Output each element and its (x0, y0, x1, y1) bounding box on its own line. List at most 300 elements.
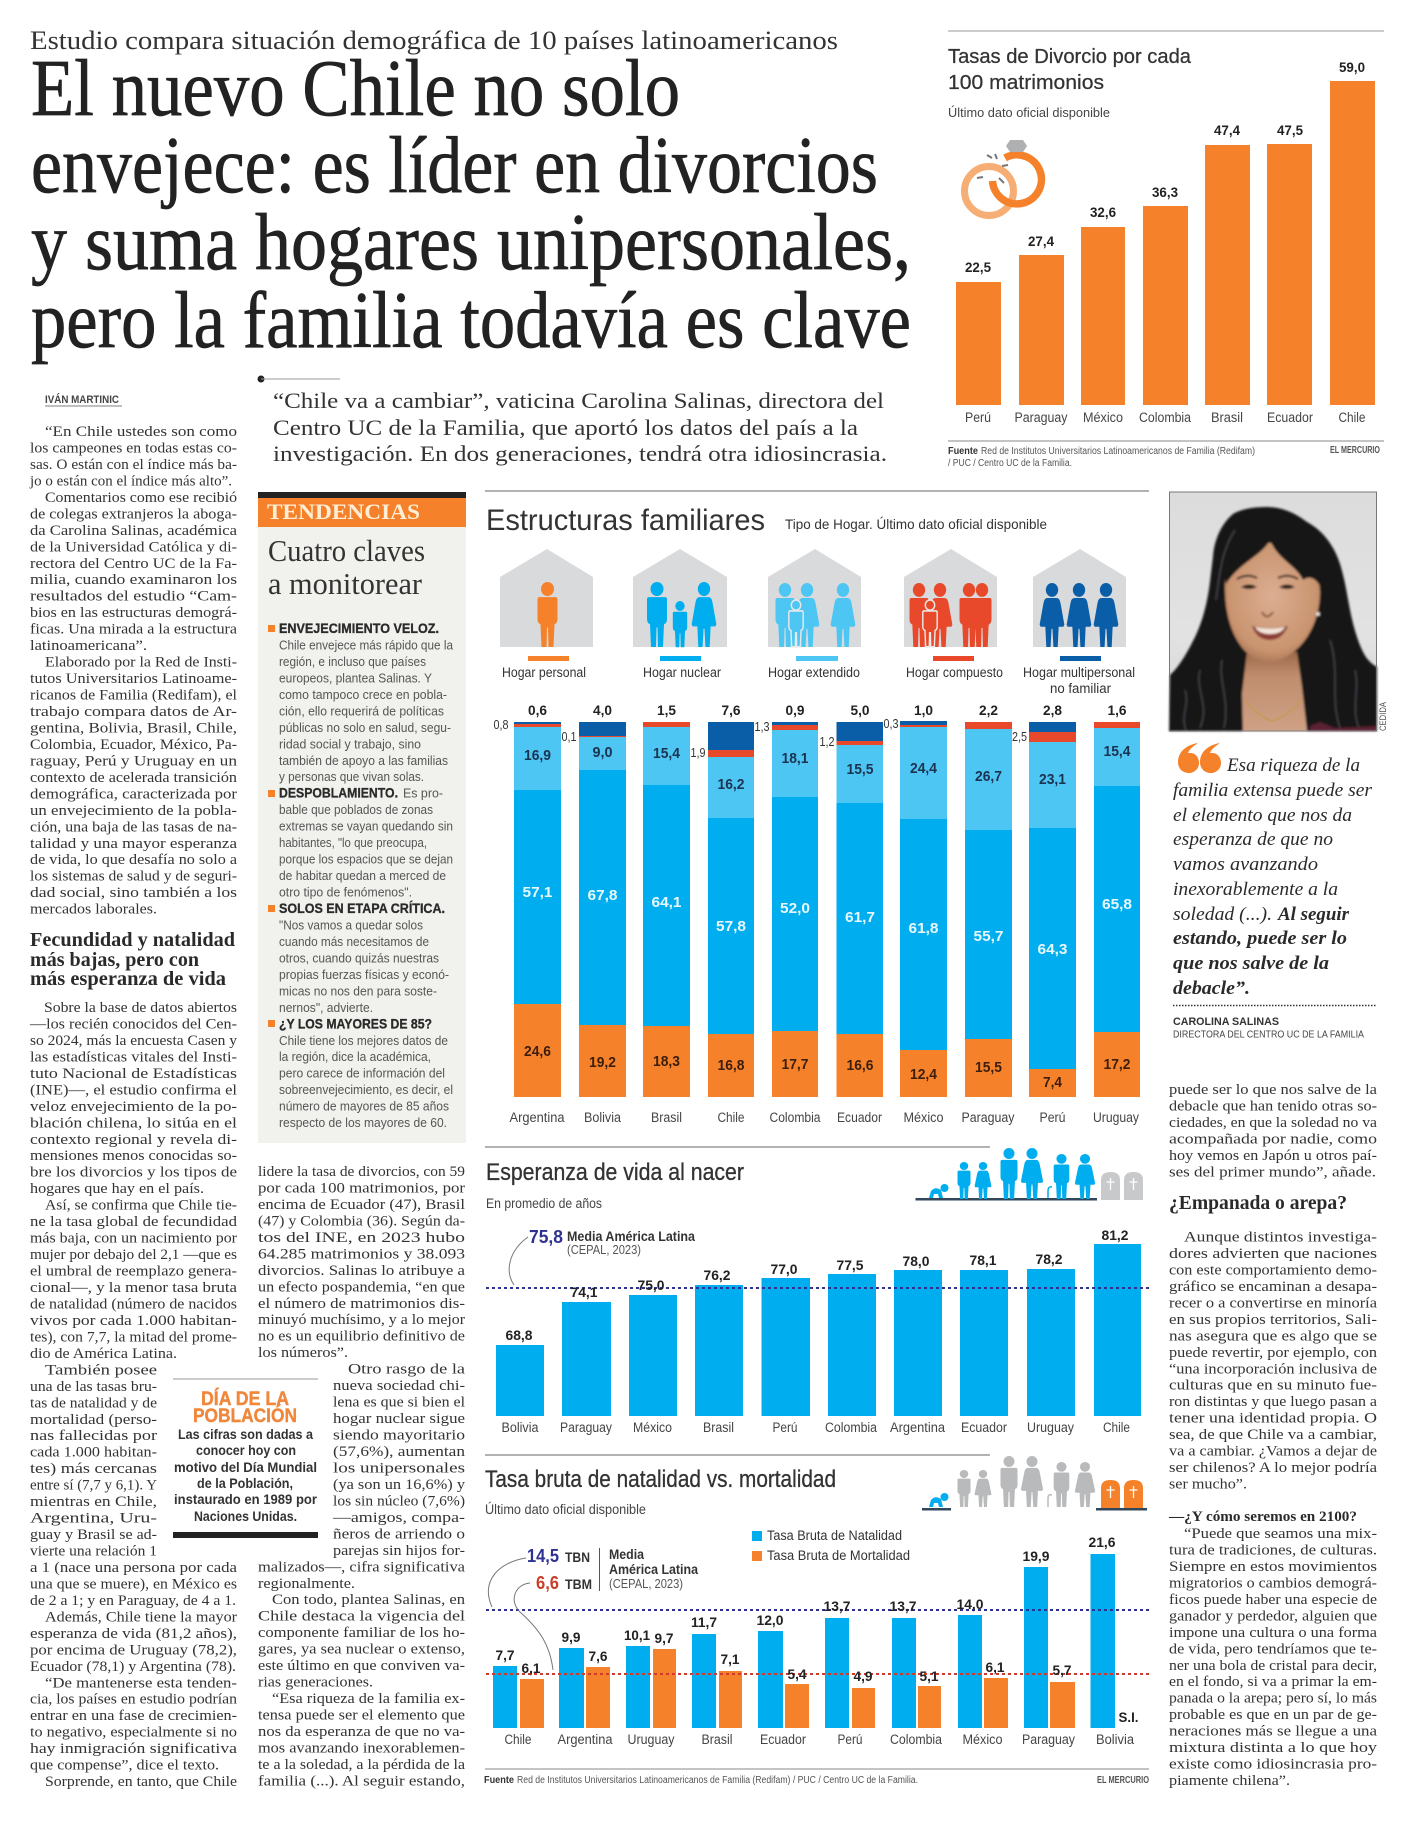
values: 21,6 (1088, 1534, 1116, 1550)
article text: column 2: —amigos, compa- (332, 1510, 465, 1526)
personal household values: 16,8 (718, 1057, 744, 1074)
article text: column 1 lower: Así, se confirma que Chile tie- (45, 1198, 237, 1214)
article text: column 2: los unipersonales (333, 1460, 465, 1476)
bullet text: de habitar quedan a merced de (279, 868, 446, 883)
article text: right column middle: con este comportamiento demo- (1169, 1262, 1377, 1278)
article text: column 2: tos del INE, en 2023 hubo (258, 1230, 465, 1246)
icon: birth and death figures (922, 1456, 1147, 1510)
decorative dot rule (258, 376, 340, 382)
bullet text: respecto de los mayores de 60. (279, 1115, 447, 1130)
article text: right column middle: Aunque distintos investiga- (1184, 1230, 1377, 1246)
bullet text: sobreenvejecimiento, es decir, el (279, 1082, 453, 1097)
nuclear household values: 61,8 (908, 920, 938, 937)
article text: column 1 lower: que compense”, dice el texto. (30, 1758, 219, 1774)
article text: column 1 lower: de natalidad (número de nacidos (30, 1296, 237, 1312)
article text: column 1 lower: vivos por cada 1.000 habitan- (30, 1313, 237, 1329)
country labels: México (633, 1420, 672, 1435)
article text: column 1: Comentarios como ese recibió (45, 490, 237, 506)
article text: column 2: gares, ya sea nuclear o extenso, (258, 1642, 465, 1658)
bar values: 27,4 (1028, 233, 1054, 249)
subheading: empanada: ¿Empanada o arepa? (1169, 1193, 1347, 1214)
quote text: Al seguir (1277, 904, 1350, 925)
bar chart: divorce rate (956, 81, 1375, 405)
article text: column 2: familia (...). Al seguir estando, (258, 1773, 465, 1789)
article text: column 1 lower: mortalidad (perso- (30, 1412, 157, 1428)
country labels: Paraguay (1014, 410, 1068, 425)
average callout (488, 1546, 698, 1670)
compound household side values: 0,3 (884, 717, 899, 731)
panel: Tendencias sidebar (258, 492, 466, 1143)
extended household values: 26,7 (975, 768, 1002, 785)
personal household values: 18,3 (653, 1053, 680, 1070)
bars (493, 1554, 1115, 1728)
bullet text: propias fuerzas físicas y econó- (279, 967, 449, 982)
country labels: Uruguay (628, 1732, 675, 1747)
panel: family structures chart (485, 491, 1149, 1125)
bullet text: bable que poblados de zonas (279, 802, 433, 817)
article text: column 1 lower: una que se muere), en México es (30, 1576, 237, 1592)
country labels: México (904, 1110, 944, 1125)
bullet text: ción, ello requerirá de políticas (279, 703, 444, 718)
values: S.I. (1118, 1709, 1138, 1725)
compound household side values: 1,9 (690, 746, 706, 760)
article text: column 1 lower: mensiones menos conocidas so- (30, 1148, 237, 1164)
article text: column 1 lower: (INE)—, el estudio confirma el (30, 1082, 237, 1098)
values: 5,7 (1052, 1662, 1072, 1678)
source note: EL MERCURIO (1097, 1775, 1149, 1786)
subheading: fecundidad: más bajas, pero con (30, 950, 199, 971)
article text: column 1 lower: veloz envejecimiento de la po- (30, 1099, 237, 1115)
quote text: soledad (...). (1173, 904, 1272, 925)
icon: broken wedding rings (964, 140, 1041, 216)
country labels: Ecuador (760, 1732, 806, 1747)
article text: column 1: talidad y una mayor esperanza (30, 836, 237, 852)
article text: right column middle (1169, 1230, 1378, 1493)
country labels: Argentina (558, 1732, 613, 1747)
sidebar title: a monitorear (268, 566, 423, 601)
values: 76,2 (704, 1267, 731, 1283)
nuclear household values: 57,8 (716, 918, 746, 935)
personal household values: 17,7 (782, 1056, 808, 1073)
article text: column 2: Con todo, plantea Salinas, en (272, 1592, 466, 1608)
article text: right column middle: va a cambiar. ¿Vamos a dejar de (1169, 1444, 1377, 1460)
article text: right column bottom: ganador y perdedor, alguien que (1169, 1608, 1377, 1624)
article text: column 1 lower: hay inmigración significativa (30, 1741, 237, 1757)
article text: column 1: ricanos de Familia (Redifam), el (30, 688, 237, 704)
values: 12,0 (756, 1612, 784, 1628)
intro paragraph: “Chile va a cambiar”, vaticina Carolina Salinas, directora del (273, 388, 884, 413)
nuclear household values: 52,0 (780, 900, 810, 917)
main headline: envejece: es líder en divorcios (31, 122, 878, 210)
article text: column 1 lower: cia, los países en estudio podrían (30, 1692, 238, 1708)
values: 75,0 (638, 1277, 665, 1293)
article text: column 1 lower: cada 1.000 habitan- (30, 1445, 157, 1461)
article text: column 1: dad social, sino también a los (30, 885, 237, 901)
article text: column 1 lower: las estadísticas vitales del Insti- (30, 1049, 237, 1065)
interview question: —¿Y cómo seremos en 2100? (1168, 1509, 1357, 1525)
article text: right column middle: ron distintas y que luego pasan a (1169, 1394, 1377, 1410)
country labels: Perú (838, 1732, 862, 1747)
bullet text: habitantes, "lo que preocupa, (279, 835, 427, 850)
quote text: el elemento que nos da (1173, 805, 1352, 826)
bar values: 59,0 (1339, 59, 1365, 75)
country labels: Brasil (651, 1110, 682, 1125)
bullet text: como tampoco crece en pobla- (279, 687, 447, 702)
quote text (1173, 755, 1373, 999)
quote attribution: CAROLINA SALINAS (1173, 1016, 1279, 1028)
chart title: Esperanza de vida al nacer (486, 1159, 744, 1186)
article text: column 1: latinoamericana”. (30, 638, 147, 654)
compound household side values: 2,5 (1012, 730, 1027, 744)
article text: column 1 lower: entrar en una fase de crecimien- (30, 1708, 237, 1724)
average callout: (CEPAL, 2023) (609, 1576, 683, 1591)
personal household values: 17,2 (1104, 1056, 1130, 1073)
personal household values: 16,6 (846, 1057, 874, 1074)
source note: Red de Institutos Universitarios Latinoamericanos de Familia (Redifam) (981, 446, 1255, 457)
nuclear household values: 64,1 (652, 894, 682, 911)
article text: column 2: nueva sociedad chi- (333, 1378, 465, 1394)
source note: Fuente (484, 1775, 514, 1786)
bullet text: europeos, plantea Salinas. Y (279, 670, 432, 685)
compound household side values: 1,2 (820, 735, 835, 749)
article text: right column bottom: neraciones más se llegue a una (1169, 1724, 1377, 1740)
average callout (509, 1227, 695, 1285)
article text: column 1 lower: —los recién conocidos del Cen- (29, 1016, 237, 1032)
country labels: Paraguay (1022, 1732, 1075, 1747)
values: 9,9 (562, 1629, 581, 1645)
article text: column 1 lower: entre sí (7,7 y 6,1). Y (30, 1478, 157, 1494)
article text: right column bottom: impone una cultura o una forma (1169, 1625, 1377, 1641)
article text: column 1 lower: tes) más cercanas (30, 1461, 157, 1477)
chart title: Tasa bruta de natalidad vs. mortalidad (485, 1466, 836, 1493)
chart subtitle: En promedio de años (486, 1196, 602, 1211)
compound household side values: 0,8 (494, 718, 509, 732)
article text: column 1 lower: Sobre la base de datos abiertos (44, 1000, 237, 1016)
country labels: Argentina (890, 1420, 945, 1435)
country labels: Colombia (825, 1420, 877, 1435)
article text: column 2: (ya son un 16,6%) y (333, 1477, 466, 1493)
callout body: Las cifras son dadas a (178, 1426, 313, 1442)
article text: column 1 lower: to negativo, especialmente si no (30, 1725, 237, 1741)
personal household values: 12,4 (910, 1066, 938, 1083)
bullet text: también de apoyo a las familias (279, 753, 448, 768)
panel: life expectancy chart (485, 1147, 1149, 1435)
article text: right column top: acompañada por nadie, como (1169, 1131, 1377, 1147)
article text: column 1: ficas. Una mirada a la estructura (30, 622, 237, 638)
article text: column 2: un efecto pospandemia, “en que (258, 1279, 465, 1295)
article text: right column middle: puede revertir, por ejemplo, con (1169, 1345, 1378, 1361)
article text: column 1: demográfica, caracterizada por (30, 786, 237, 802)
bar values: 47,4 (1214, 122, 1240, 138)
source note: Fuente (948, 446, 978, 457)
chart subtitle: Último dato oficial disponible (948, 105, 1110, 120)
values: 6,1 (522, 1660, 541, 1676)
main headline: pero la familia todavía es clave (31, 277, 911, 365)
top segment values: 2,8 (1043, 702, 1062, 718)
article text: column 1: da Carolina Salinas, académica (30, 523, 237, 539)
article text: column 2 (258, 1164, 466, 1789)
article text: column 1 lower: nas fallecidas por (30, 1428, 157, 1444)
country labels: Paraguay (560, 1420, 612, 1435)
article text: column 2: por cada 100 matrimonios, por (258, 1180, 465, 1196)
callout heading: POBLACIÓN (193, 1405, 297, 1427)
article text: column 1: de colegas extranjeros la aboga- (30, 506, 237, 522)
legend (502, 656, 1135, 696)
quote text: que nos salve de la (1173, 953, 1330, 974)
compound household side values (494, 717, 1027, 760)
top segment values: 2,2 (979, 702, 998, 718)
article text: column 1: ción, una baja de las tasas de na- (30, 819, 237, 835)
values: 6,1 (986, 1659, 1005, 1675)
top segment values: 7,6 (722, 702, 741, 718)
article text: right column top (1169, 1082, 1377, 1180)
top segment values: 0,9 (786, 702, 805, 718)
bar values: 36,3 (1152, 184, 1178, 200)
article text: column 1 lower: También posee (45, 1362, 157, 1378)
article text: column 1: “En Chile ustedes son como (45, 424, 237, 440)
country labels: Uruguay (1027, 1420, 1074, 1435)
article text: column 2: rias generaciones. (258, 1675, 373, 1691)
article text: column 1: de la Universidad Católica y di- (30, 539, 237, 555)
article text: column 1 lower (29, 1000, 238, 1790)
country labels: Bolivia (502, 1420, 539, 1435)
chart title: 100 matrimonios (948, 72, 1104, 94)
values (496, 1534, 1138, 1725)
article text: right column bottom: existe como idiosincrasia pro- (1169, 1757, 1377, 1773)
values (506, 1227, 1129, 1343)
article text: column 1 lower: mientras en Chile, (30, 1494, 157, 1510)
nuclear household values: 57,1 (522, 884, 552, 901)
article text: right column bottom: migratorios o cambios demográ- (1169, 1575, 1377, 1591)
panel: pull quote (1173, 743, 1376, 1040)
photo: Carolina Salinas portrait (1169, 492, 1377, 731)
article text: right column top: ses del primer mundo”, añade. (1169, 1164, 1376, 1180)
bullet text: públicas no solo en salud, segu- (279, 720, 451, 735)
intro paragraph: investigación. En dos generaciones, tendrá otra idiosincrasia. (273, 441, 887, 466)
sidebar tag: TENDENCIAS (267, 499, 420, 524)
article text: column 1: trabajo compara datos de Ar- (30, 704, 237, 720)
article text: column 2: minuyó muchísimo, y a lo mejor (258, 1312, 465, 1328)
quote text: vamos avanzando (1173, 854, 1318, 875)
article text: right column middle: tener una identidad propia. O (1169, 1411, 1377, 1427)
article text: column 1 lower: blación chilena, lo sitúa en el (30, 1115, 237, 1131)
article text: column 2: componente familiar de los ho- (258, 1625, 465, 1641)
article text: column 1 lower: una de las tasas bru- (30, 1379, 157, 1395)
article text: right column middle: gráfico se encaminan a desapa- (1169, 1279, 1377, 1295)
bullet text: otro tipo de fenómenos". (279, 884, 412, 900)
extended household values: 9,0 (592, 744, 612, 761)
quote text: estando, puede ser lo (1173, 928, 1347, 949)
byline: IVÁN MARTINIC (45, 393, 119, 406)
article text: column 1: sas. O están con el índice más ba- (30, 457, 237, 473)
article text: column 1 lower: esperanza de vida (81,2 años), (30, 1626, 237, 1642)
article text: column 2: los sin núcleo (7,6%) (333, 1493, 465, 1509)
legend: Hogar nuclear (643, 665, 721, 680)
bullet text: extremas se vayan quedando sin (279, 819, 453, 834)
callout body: conocer hoy con (196, 1442, 296, 1458)
callout body: motivo del Día Mundial (174, 1459, 317, 1475)
main headline (31, 45, 911, 365)
bullet text: Chile tiene los mejores datos de (279, 1033, 448, 1048)
article text: column 2: lidere la tasa de divorcios, con 59 (258, 1164, 465, 1180)
article text: column 1: bios en las estructuras demográ- (30, 605, 237, 621)
bullet headings: ¿Y LOS MAYORES DE 85? (279, 1016, 432, 1031)
values: 7,6 (588, 1648, 608, 1664)
article text: column 2: mos avanzando inexorablemen- (258, 1740, 465, 1756)
article text: column 1: contexto de acelerada transición (30, 770, 238, 786)
average callout: 6,6 (536, 1573, 559, 1593)
legend: Hogar multipersonal (1023, 665, 1135, 680)
values: 5,1 (920, 1668, 939, 1684)
chart title: Tasas de Divorcio por cada (948, 46, 1192, 68)
article text: right column bottom: ner una bola de cristal para decir, (1169, 1658, 1377, 1674)
values: 5,4 (788, 1666, 807, 1682)
article text: column 1: tutos Universitarios Latinoame- (30, 671, 237, 687)
country labels (504, 1732, 1134, 1747)
country labels: Perú (965, 410, 991, 425)
article text: right column middle: “una incorporación inclusiva de (1169, 1361, 1377, 1377)
article text: column 1 lower: tuto Nacional de Estadísticas (30, 1066, 237, 1082)
average callout: América Latina (609, 1561, 698, 1577)
article text: column 2: (57,6%), aumentan (333, 1444, 466, 1460)
article text: right column middle: nas asegura que es algo que se (1169, 1328, 1377, 1344)
article text: column 1 lower: Argentina, Uru- (30, 1511, 157, 1527)
values: 9,7 (654, 1630, 674, 1646)
chart subtitle: Último dato oficial disponible (485, 1502, 646, 1517)
article text: column 1: mercados laborales. (30, 902, 157, 918)
country labels: México (962, 1732, 1002, 1747)
article text: right column bottom: tura de tradiciones, de culturas. (1169, 1542, 1377, 1558)
main headline: y suma hogares unipersonales, (31, 199, 911, 287)
article text: right column middle: culturas que en su minuto fue- (1169, 1378, 1377, 1394)
article text: right column bottom: piamente chilena”. (1169, 1773, 1290, 1789)
values: 78,2 (1036, 1251, 1063, 1267)
kicker subtitle: Estudio compara situación demográfica de 10 países latinoamericanos (30, 26, 838, 55)
bullet text: Chile envejece más rápido que la (279, 638, 454, 652)
average callout: TBN (565, 1549, 590, 1565)
bullet headings (279, 621, 445, 1031)
values: 81,2 (1102, 1227, 1129, 1243)
article text: column 1 lower: Sorprende, en tanto, que Chile (45, 1774, 237, 1790)
bullet text: nernos", advierte. (279, 1000, 373, 1015)
bullet text: cuando más necesitamos de (279, 934, 429, 949)
bar values (965, 59, 1365, 275)
values: 4,9 (854, 1668, 873, 1684)
country labels: Chile (718, 1110, 744, 1125)
average callout: 14,5 (527, 1546, 559, 1566)
bullet headings: DESPOBLAMIENTO. (279, 786, 398, 801)
chart title: Estructuras familiares (486, 504, 765, 537)
subheading: fecundidad: Fecundidad y natalidad (30, 930, 235, 951)
average callout: (CEPAL, 2023) (567, 1242, 641, 1257)
nuclear household values: 61,7 (845, 909, 875, 926)
values: 11,7 (691, 1614, 717, 1630)
top segment values (528, 702, 1127, 718)
article text: column 1 lower: vierte una relación 1 (30, 1544, 157, 1560)
article text: column 1: los campeones en todas estas co- (30, 440, 237, 456)
country labels: Colombia (770, 1110, 821, 1125)
article text: right column bottom: mixtura distinta a lo que hoy (1169, 1740, 1378, 1756)
country labels: Bolivia (1096, 1732, 1134, 1747)
country labels: Ecuador (837, 1110, 882, 1125)
article text: column 1: Elaborado por la Red de Insti- (45, 655, 237, 671)
article text: right column bottom: panada o la arepa; pero sí, lo más (1169, 1691, 1377, 1707)
nuclear household values: 65,8 (1102, 896, 1132, 913)
article text: right column bottom (1169, 1526, 1378, 1789)
article text: column 2: el número de matrimonios dis- (258, 1296, 465, 1312)
bullet text: número de mayores de 85 años (279, 1099, 449, 1114)
bullet text: la región, dice la académica, (279, 1049, 431, 1064)
country labels: Colombia (1139, 410, 1191, 425)
bullet text (279, 638, 454, 1130)
values: 10,1 (624, 1627, 650, 1643)
article text: right column top: ciedades, en que la soledad no va (1169, 1115, 1377, 1131)
article text: column 1: gentina, Bolivia, Brasil, Chile, (30, 720, 237, 736)
personal household values: 7,4 (1043, 1074, 1063, 1091)
average callout: TBM (565, 1576, 592, 1592)
bars (496, 1244, 1141, 1416)
bullet text: micas no nos den para soste- (279, 983, 437, 998)
article text: column 2: (47) y Colombia (36). Según da- (258, 1213, 465, 1229)
callout: Día de la Población (173, 1379, 318, 1538)
article text: column 2: nos da esperanza de que no va- (258, 1724, 465, 1740)
average callout: Media (609, 1546, 644, 1562)
top segment values: 0,6 (528, 702, 547, 718)
article text: right column top: puede ser lo que nos salve de la (1169, 1082, 1377, 1098)
bullet text: ridad social y trabajo, sino (279, 736, 421, 751)
article text: column 1 lower: hogares que hay en el país. (30, 1181, 204, 1197)
article text: column 2: no es un equilibrio definitivo de (258, 1329, 465, 1345)
bullet text: otros, cuando quizás nuestras (279, 950, 439, 965)
extended household values: 23,1 (1039, 771, 1066, 788)
legend: Tasa Bruta de Mortalidad (767, 1548, 910, 1563)
quote attribution (1173, 1016, 1364, 1040)
legend: Hogar extendido (768, 665, 860, 680)
bullet squares (268, 625, 275, 1027)
values: 78,0 (902, 1253, 930, 1269)
extended household values: 15,5 (846, 761, 874, 778)
intro paragraph (273, 388, 887, 466)
bullet text: Es pro- (403, 786, 443, 801)
top segment values: 5,0 (850, 702, 870, 718)
article text: column 1 lower: Además, Chile tiene la mayor (45, 1609, 237, 1625)
quote attribution: DIRECTORA DEL CENTRO UC DE LA FAMILIA (1173, 1030, 1364, 1040)
quote text: esperanza de que no (1173, 829, 1333, 850)
intro paragraph: Centro UC de la Familia, que aportó los datos del país a la (273, 415, 858, 440)
callout body (174, 1426, 318, 1524)
article text: right column middle: en sus propios territorios, Sali- (1169, 1312, 1377, 1328)
article text: column 1 lower: a 1 (nace una persona por cada (30, 1560, 237, 1576)
article text: column 1 lower: guay y Brasil se ad- (30, 1527, 157, 1543)
article text: column 2: encima de Ecuador (47), Brasil (258, 1197, 465, 1213)
article text: column 1 lower: bre los divorcios y los tipos de (30, 1165, 237, 1181)
article text: column 1 lower: tes), con 7,7, la mitad del prome- (30, 1329, 237, 1345)
country labels: Brasil (1211, 410, 1243, 425)
extended household values: 18,1 (782, 750, 808, 767)
article text: column 1 lower: dio de América Latina. (30, 1346, 177, 1362)
source note (484, 1775, 1149, 1786)
nuclear household values: 55,7 (974, 928, 1004, 945)
values: 13,7 (824, 1598, 851, 1614)
compound household side values: 0,1 (562, 730, 577, 744)
icon: orange quotation mark (1178, 743, 1221, 773)
article text: column 1: raguay, Perú y Uruguay en un (30, 753, 238, 769)
bar values: 32,6 (1090, 204, 1116, 220)
article text: right column middle: ser chilenos? A lo mejor podría (1169, 1460, 1377, 1476)
country labels: Colombia (890, 1732, 942, 1747)
top segment values: 1,6 (1108, 702, 1127, 718)
nuclear household values: 64,3 (1038, 941, 1068, 958)
